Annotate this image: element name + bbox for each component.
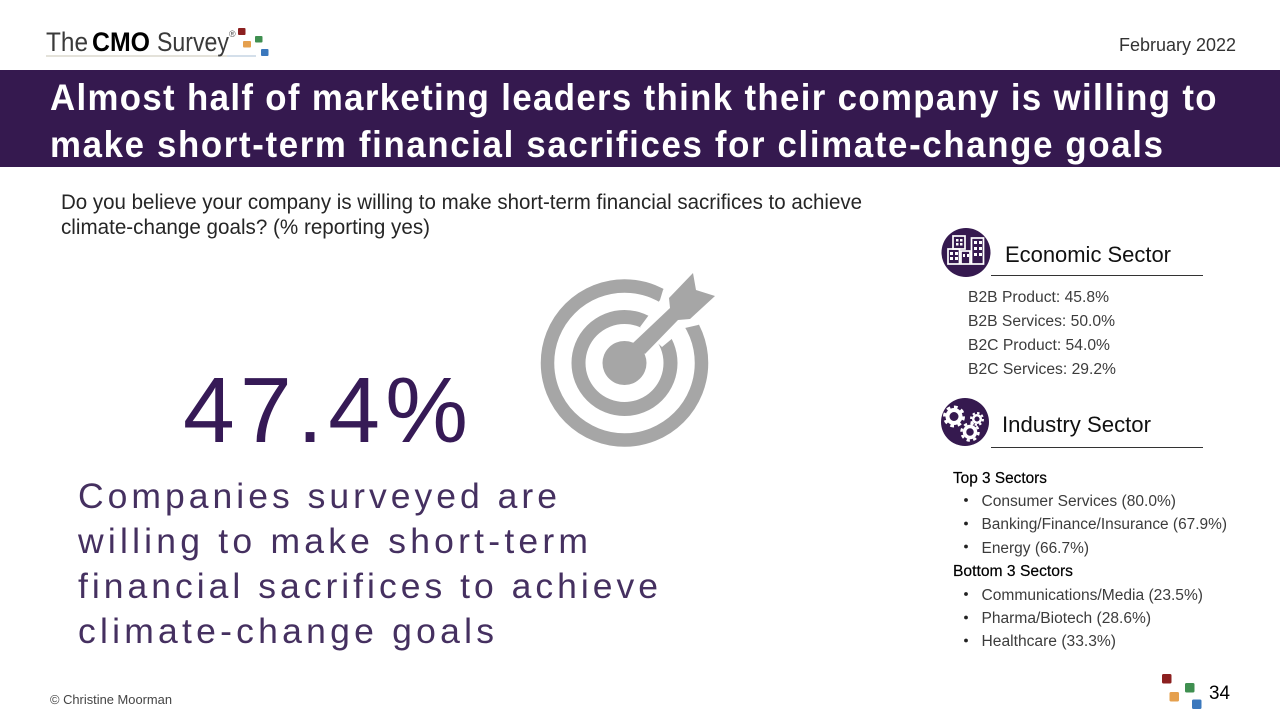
date: February 2022 bbox=[1119, 35, 1236, 55]
key figure description: climate-change goals bbox=[78, 611, 494, 651]
logo: The CMO Survey: ® bbox=[229, 29, 236, 39]
footer logo squares bbox=[1162, 674, 1202, 709]
icon: gears bbox=[941, 398, 989, 446]
economic sector values: B2B Services: 50.0% bbox=[968, 313, 1115, 330]
page number: 34 bbox=[1209, 683, 1230, 704]
logo: The CMO Survey: The bbox=[46, 27, 88, 57]
panel: industry sector bbox=[941, 398, 1227, 650]
bottom 3 sectors list: Bottom 3 Sectors bbox=[953, 563, 1073, 580]
title banner: make short-term financial sacrifices for climate-change goals bbox=[50, 124, 1163, 165]
logo: The CMO Survey: CMO bbox=[92, 27, 150, 57]
key figure: 47.4%: 47.4% bbox=[183, 358, 468, 462]
bottom 3 sectors list: Pharma/Biotech (28.6%) bbox=[982, 610, 1151, 627]
top 3 sectors list bbox=[953, 470, 1227, 557]
survey question: Do you believe your company is willing to make short-term financial sacrifices to achieve bbox=[61, 190, 862, 214]
key figure description: willing to make short-term bbox=[77, 521, 588, 561]
copyright: © Christine Moorman bbox=[50, 692, 172, 707]
heading: economic sector: Economic Sector bbox=[1005, 242, 1171, 267]
logo: The CMO Survey: Survey bbox=[157, 27, 229, 57]
icon: buildings bbox=[942, 228, 990, 277]
top 3 sectors list: Top 3 Sectors bbox=[953, 470, 1047, 487]
bottom 3 sectors list: Healthcare (33.3%) bbox=[982, 633, 1116, 650]
logo: The CMO Survey bbox=[46, 27, 268, 57]
economic sector values bbox=[968, 289, 1116, 378]
top 3 sectors list: Consumer Services (80.0%) bbox=[982, 493, 1176, 510]
survey question: climate-change goals? (% reporting yes) bbox=[61, 215, 430, 239]
key figure description: Companies surveyed are bbox=[78, 476, 557, 516]
economic sector values: B2C Product: 54.0% bbox=[968, 337, 1110, 354]
key figure description bbox=[77, 476, 658, 651]
top 3 sectors list: Banking/Finance/Insurance (67.9%) bbox=[982, 516, 1227, 533]
economic sector values: B2C Services: 29.2% bbox=[968, 361, 1116, 378]
icon: target with arrow bbox=[548, 260, 735, 440]
economic sector values: B2B Product: 45.8% bbox=[968, 289, 1109, 306]
title banner bbox=[0, 70, 1280, 167]
top 3 sectors list: Energy (66.7%) bbox=[982, 540, 1089, 557]
bottom 3 sectors list: Communications/Media (23.5%) bbox=[982, 587, 1203, 604]
key figure description: financial sacrifices to achieve bbox=[78, 566, 658, 606]
bottom 3 sectors list bbox=[953, 563, 1203, 650]
survey question bbox=[61, 190, 862, 239]
title banner: Almost half of marketing leaders think their company is willing to bbox=[50, 77, 1217, 118]
heading: industry sector: Industry Sector bbox=[1002, 412, 1151, 437]
panel: economic sector bbox=[942, 228, 1203, 378]
